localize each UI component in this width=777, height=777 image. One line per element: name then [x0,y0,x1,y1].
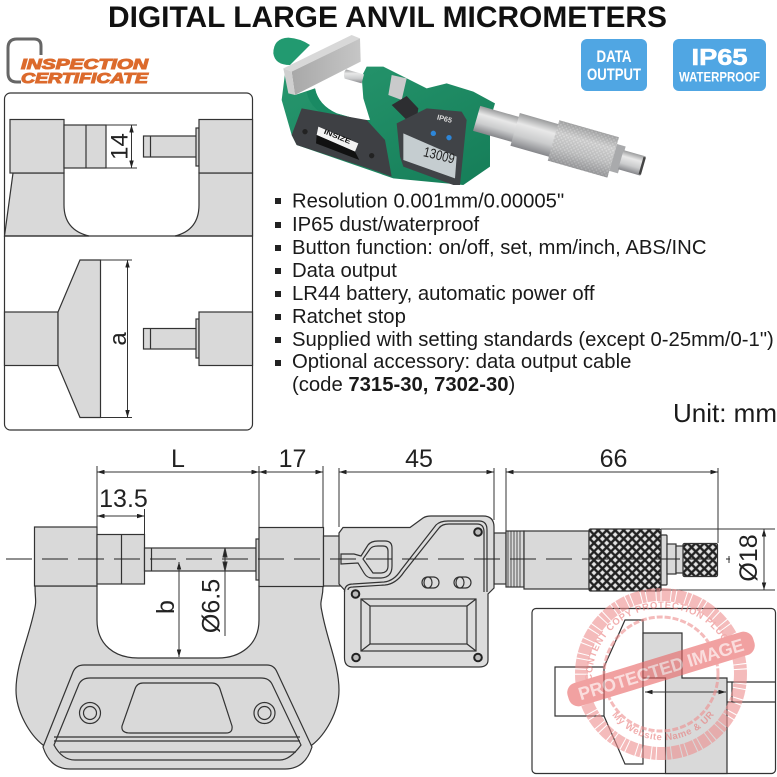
feature list: Resolution 0.001mm/0.00005" [292,190,564,212]
dimension: L and 17: 17 [279,445,306,473]
badge: data output [581,39,647,91]
icon: inspection certificate logo [8,39,150,87]
anvil [283,35,361,95]
LCD screen [403,133,457,178]
feature list: Button function: on/off, set, mm/inch, ABS/INC [292,237,706,259]
dimension: diameter 18 [661,529,775,590]
feature list: (code 7315-30, 7302-30) [292,374,515,396]
spindle [344,69,364,83]
silver collar [388,75,407,100]
upper view: left anvil blocks [10,120,106,173]
badge: data output: OUTPUT [587,66,641,84]
digital body [339,516,494,667]
panel: anvil dimension views [4,93,252,430]
IP65 label: IP65 [436,113,453,125]
upper green cylinder [273,38,310,65]
dimension: L and 17 [97,445,323,534]
title: DIGITAL LARGE ANVIL MICROMETERS [108,1,667,34]
green frame [282,67,495,185]
dimension: 45: 45 [405,445,433,473]
dimension: diameter 6.5: Ø6.5 [198,579,226,633]
LCD window [361,599,476,651]
badge: data output: DATA [596,48,632,66]
feature list: IP65 dust/waterproof [292,214,480,236]
upper view: spindle and right block [144,120,252,173]
blue buttons [431,131,436,136]
plate screws [80,702,275,724]
feature list: Ratchet stop [292,306,406,328]
display housing [397,108,467,185]
ratchet [661,535,718,585]
badge: IP65 waterproof: WATERPROOF [679,68,760,84]
main technical drawing [6,445,775,769]
watermark banner: PROTECTED IMAGE [576,635,746,704]
lock lever [341,541,392,578]
feature list [275,190,774,396]
setting block [643,633,727,774]
dimension: 13.5 [97,485,148,534]
spindle stub [727,682,775,702]
dimension: a: a [105,332,132,346]
icon: inspection certificate logo: INSPECTION [21,57,149,73]
large anvil outline [555,620,643,764]
dimension: 14 [106,125,137,168]
center line [6,558,730,560]
badge: IP65 waterproof: IP65 [692,44,748,70]
unit label: Unit: mm [673,398,777,428]
inner shade of frame opening [307,88,372,126]
grip plate [43,665,312,769]
feature list: Data output [292,260,397,282]
display screws [352,528,482,661]
anvil blocks [34,527,144,586]
watermark stamp: My Website Name & URL Here [612,712,714,740]
product photo: digital micrometer [273,35,649,186]
dimension: 13.5: 13.5 [99,485,148,513]
panel: setup detail view [532,608,776,774]
dimension: b: b [152,600,180,614]
plate screws [302,129,308,134]
dimension: b [152,562,180,657]
dimension: diameter 6.5 [198,548,227,636]
icon: inspection certificate logo: CERTIFICATE [21,71,150,87]
knurled thimble [589,529,661,591]
feature list: Supplied with setting standards (except 0-25mm/0-1") [292,329,774,351]
lower view: spindle and right block [144,312,252,366]
dark grip plate [292,108,392,177]
dimension: 66: 66 [600,445,627,473]
s-curve seam [344,521,487,592]
upper view: frame arms [4,173,252,236]
dimension: diameter 18: Ø18 [735,534,763,582]
dimension: 14: 14 [106,133,134,160]
watermark stamp: WP CONTENT COPY PROTECTION PLUGIN [586,602,727,680]
dimension arrow [645,691,726,693]
feature list: LR44 battery, automatic power off [292,283,595,305]
dark lock lever [392,96,418,120]
spindle [144,528,344,586]
thimble assembly [471,98,649,186]
badge: IP65 waterproof [673,39,766,91]
LCD screen: 13009 [422,143,457,167]
logo label [316,127,359,160]
logo label: INSIZE [323,129,352,146]
feature list: Optional accessory: data output cable [292,351,631,373]
frame [16,586,339,745]
dimension: L and 17: L [171,445,185,473]
lower view: large anvil [4,260,100,418]
oblong buttons [422,577,471,588]
thimble and sleeve [494,531,589,589]
